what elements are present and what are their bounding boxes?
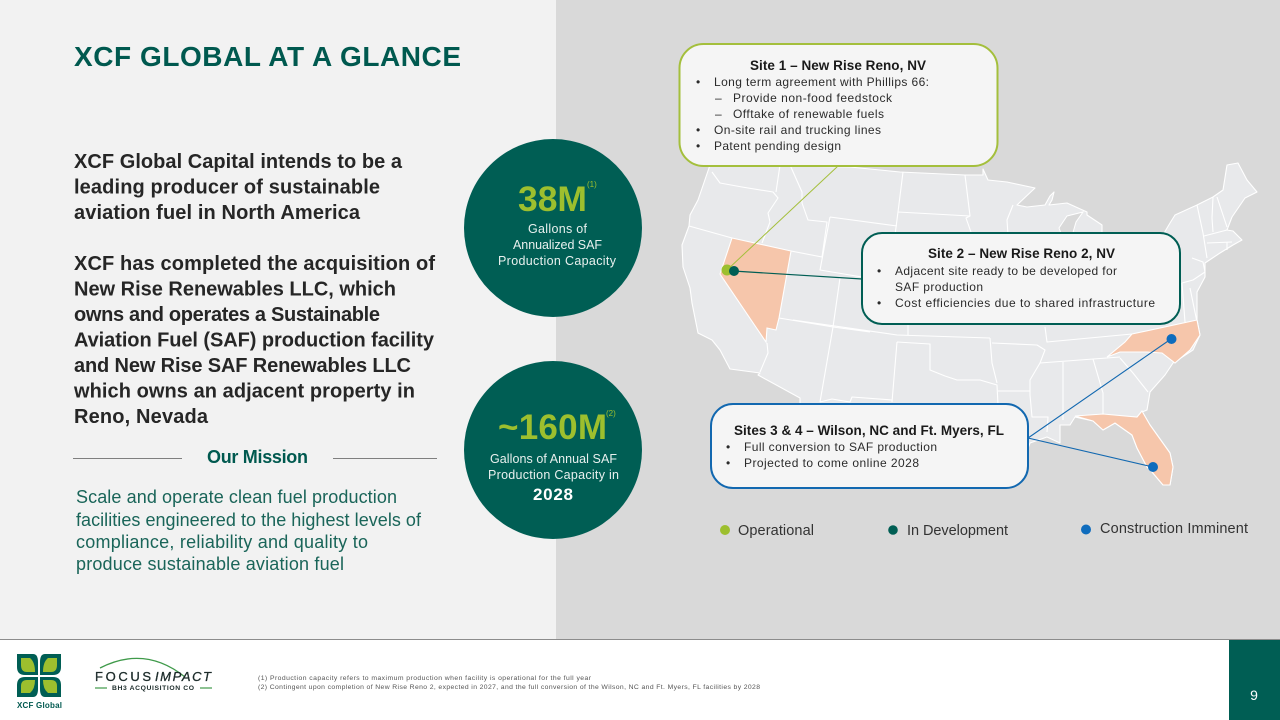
callout: site 2: SAF production: [895, 280, 983, 294]
callout: site 1: •: [696, 139, 700, 153]
stat circle: 38M: Gallons of: [528, 222, 588, 236]
callout: site 1: Provide non-food feedstock: [733, 91, 893, 105]
logo: XCF Global: XCF Global: [17, 701, 62, 710]
stat circle: 38M: Production Capacity: [498, 254, 617, 268]
callout: site 1: •: [696, 123, 700, 137]
footnotes: (2) Contingent upon completion of New Rise Reno 2, expected in 2027, and the full conversion of the Wilson, NC and Ft. Myers, FL facilities by 2028: [258, 684, 760, 691]
logo: Focus Impact: BH3 ACQUISITION CO: [112, 685, 194, 692]
callout: sites 3 and 4: Projected to come online 2028: [744, 456, 919, 470]
mission text: [76, 487, 422, 574]
footnotes: (1) Production capacity refers to maximum production when facility is operational for the full year: [258, 675, 592, 682]
callout: site 1: On-site rail and trucking lines: [714, 123, 881, 137]
stat circle: 160M: Production Capacity in: [488, 468, 619, 482]
stat circle: 38M: (1): [587, 180, 597, 189]
callout: site 1: –: [715, 107, 722, 121]
legend: Operational: [738, 523, 814, 539]
our mission heading: Our Mission: [207, 447, 308, 467]
connector: site 1: [727, 166, 838, 270]
callout: site 1: –: [715, 91, 722, 105]
callout: site 1: Offtake of renewable fuels: [733, 107, 884, 121]
right panel background: [556, 0, 1280, 639]
US map: [682, 163, 1257, 485]
stat circle: 38M: Annualized SAF: [513, 238, 602, 252]
legend: [720, 521, 1248, 539]
stat circle: 160M: Gallons of Annual SAF: [490, 452, 617, 466]
page number block: 9: [1250, 687, 1258, 703]
acquisition text block: owns and operates a Sustainable: [74, 304, 380, 326]
callout: site 2: Site 2 – New Rise Reno 2, NV: [928, 246, 1115, 261]
intro text block: leading producer of sustainable: [74, 176, 380, 198]
acquisition text block: New Rise Renewables LLC, which: [74, 278, 396, 300]
logo: Focus Impact: FOCUS: [95, 669, 151, 684]
logo: Focus Impact: IMPACT: [155, 669, 212, 684]
stat circle: 160M: 2028: [533, 485, 573, 504]
footer bar: [0, 639, 1280, 720]
callout: site 1: Site 1 – New Rise Reno, NV: [750, 58, 926, 73]
mission text: produce sustainable aviation fuel: [76, 554, 344, 574]
marker: site 2 in development: [729, 266, 739, 276]
callout: site 1: •: [696, 75, 700, 89]
callout: sites 3 and 4: •: [726, 440, 730, 454]
callout: sites 3 and 4: Sites 3 & 4 – Wilson, NC and Ft. Myers, FL: [734, 423, 1004, 438]
callout: sites 3 and 4: [711, 404, 1028, 488]
callout: site 1: Long term agreement with Phillips 66:: [714, 75, 929, 89]
acquisition text block: [73, 253, 435, 428]
callout: site 2: •: [877, 296, 881, 310]
acquisition text block: Reno, Nevada: [74, 406, 209, 428]
footnotes: [258, 675, 760, 691]
callout: sites 3 and 4: Full conversion to SAF production: [744, 440, 937, 454]
legend: In Development: [907, 523, 1008, 539]
acquisition text block: and New Rise SAF Renewables LLC: [74, 355, 411, 377]
callout: site 1: Patent pending design: [714, 139, 841, 153]
legend: Construction Imminent: [1100, 521, 1248, 537]
intro text block: aviation fuel in North America: [74, 202, 361, 224]
stat circle: 160M: ~160M: [498, 408, 607, 447]
florida highlight: [1075, 411, 1173, 485]
callout: site 2: [862, 233, 1180, 324]
stat circle: 160M: (2): [606, 409, 616, 418]
acquisition text block: which owns an adjacent property in: [73, 380, 415, 402]
marker: Wilson NC: [1166, 334, 1176, 344]
callout: site 2: •: [877, 264, 881, 278]
acquisition text block: XCF has completed the acquisition of: [74, 253, 435, 275]
intro text block: XCF Global Capital intends to be a: [74, 151, 403, 173]
intro text block: [74, 151, 403, 224]
mission text: compliance, reliability and quality to: [76, 532, 368, 552]
stat circle: 38M: [464, 139, 642, 317]
callout: site 2: Adjacent site ready to be developed for: [895, 264, 1117, 278]
logo: XCF Global: [17, 654, 62, 710]
map land: [682, 163, 1257, 485]
callout: sites 3 and 4: •: [726, 456, 730, 470]
stat circle: 38M: 38M: [518, 179, 587, 219]
stat circle: 160M: [464, 361, 642, 539]
callout: site 1: [680, 44, 998, 166]
nevada highlight: [720, 238, 791, 342]
north carolina highlight: [1107, 320, 1200, 363]
mission text: facilities engineered to the highest levels of: [76, 510, 422, 530]
acquisition text block: Aviation Fuel (SAF) production facility: [74, 330, 435, 352]
marker: Ft. Myers FL: [1148, 462, 1158, 472]
mission text: Scale and operate clean fuel production: [76, 487, 397, 507]
state borders: [689, 165, 1232, 432]
logo: Focus Impact: [95, 658, 212, 692]
left panel background: [0, 0, 556, 639]
connector: site 2: [733, 271, 862, 279]
callout: site 2: Cost efficiencies due to shared infrastructure: [895, 296, 1155, 310]
marker: site 1 operational: [722, 264, 732, 276]
page number block: [1229, 640, 1280, 720]
title: XCF GLOBAL AT A GLANCE: [74, 41, 461, 72]
connectors: sites 3 and 4: [1028, 339, 1171, 467]
lake michigan: [1059, 212, 1083, 236]
